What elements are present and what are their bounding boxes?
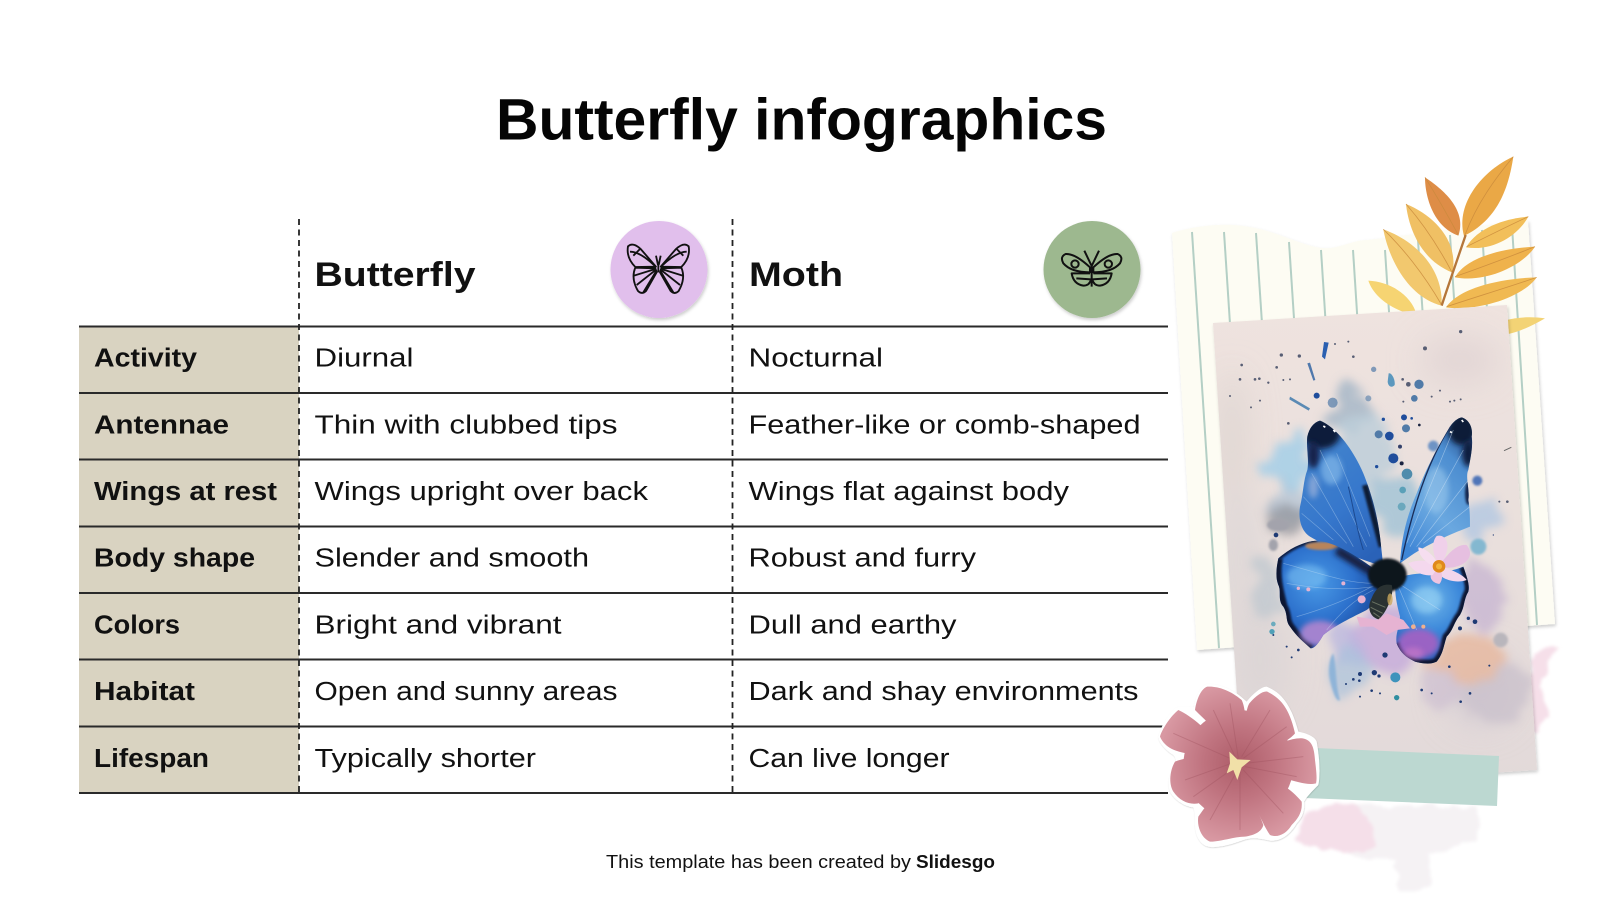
row: Body shape: Robust and furry [748, 545, 976, 573]
icon: moth badge [1044, 221, 1140, 318]
row: Lifespan: Can live longer [748, 745, 950, 773]
row: Wings at rest: Wings upright over back [314, 478, 648, 506]
row: Wings at rest [94, 478, 1069, 506]
row: Lifespan: Lifespan [94, 745, 209, 773]
pressed red flower sticker [1158, 684, 1320, 847]
mint washi tape [1305, 748, 1499, 806]
row: Wings at rest: Wings flat against body [748, 478, 1069, 506]
row: Wings at rest: Wings at rest [94, 478, 278, 506]
pink watercolor wash, right [1525, 643, 1560, 730]
splash clouds [1250, 384, 1530, 726]
row: Antennae: Antennae [94, 411, 229, 439]
row: Habitat [94, 678, 1138, 706]
row: Lifespan: Typically shorter [314, 745, 537, 773]
row: Colors: Dull and earthy [748, 611, 957, 639]
icon: butterfly badge [610, 221, 708, 318]
table [79, 219, 1168, 793]
row: Activity: Activity [94, 345, 198, 373]
row: Colors [94, 611, 957, 639]
column heading: Butterfly: Butterfly [314, 256, 476, 294]
row: Colors: Bright and vibrant [314, 611, 562, 639]
footer credit: Slidesgo [916, 851, 995, 872]
dashed column dividers [299, 219, 732, 793]
row: Habitat: Open and sunny areas [314, 678, 618, 706]
row: Activity: Nocturnal [748, 345, 883, 373]
row: Habitat: Habitat [94, 678, 196, 706]
butterfly: upper wings [1299, 415, 1475, 567]
painted butterfly card [1213, 305, 1537, 788]
watercolor wash, bottom [1293, 803, 1480, 892]
row: Antennae [94, 411, 1140, 439]
footer credit: This template has been created by [606, 851, 912, 872]
row label column background [79, 326, 299, 793]
orange leaf sprig [1368, 157, 1545, 334]
pink paint splashes [1297, 581, 1425, 635]
row: Activity: Diurnal [314, 345, 414, 373]
paper stains [1224, 343, 1484, 682]
column heading: Moth: Moth [749, 256, 843, 294]
collage artwork [1158, 157, 1560, 892]
row: Antennae: Feather-like or comb-shaped [748, 411, 1140, 439]
body [1368, 558, 1407, 592]
row: Body shape [94, 545, 976, 573]
paint droplets lower [1329, 653, 1340, 701]
row: Body shape: Slender and smooth [314, 545, 589, 573]
row: Habitat: Dark and shay environments [748, 678, 1138, 706]
paint droplets upper [1229, 330, 1511, 511]
row: Lifespan [94, 745, 950, 773]
striped paper [1172, 220, 1555, 650]
row: Antennae: Thin with clubbed tips [314, 411, 618, 439]
row: Colors: Colors [94, 611, 180, 639]
butterfly: lower wings and body [1267, 519, 1508, 703]
horizontal row rules [79, 326, 1168, 793]
title: Butterfly infographics [496, 88, 1107, 152]
cosmos flower [1408, 536, 1470, 584]
row: Activity [94, 345, 883, 373]
row: Body shape: Body shape [94, 545, 255, 573]
